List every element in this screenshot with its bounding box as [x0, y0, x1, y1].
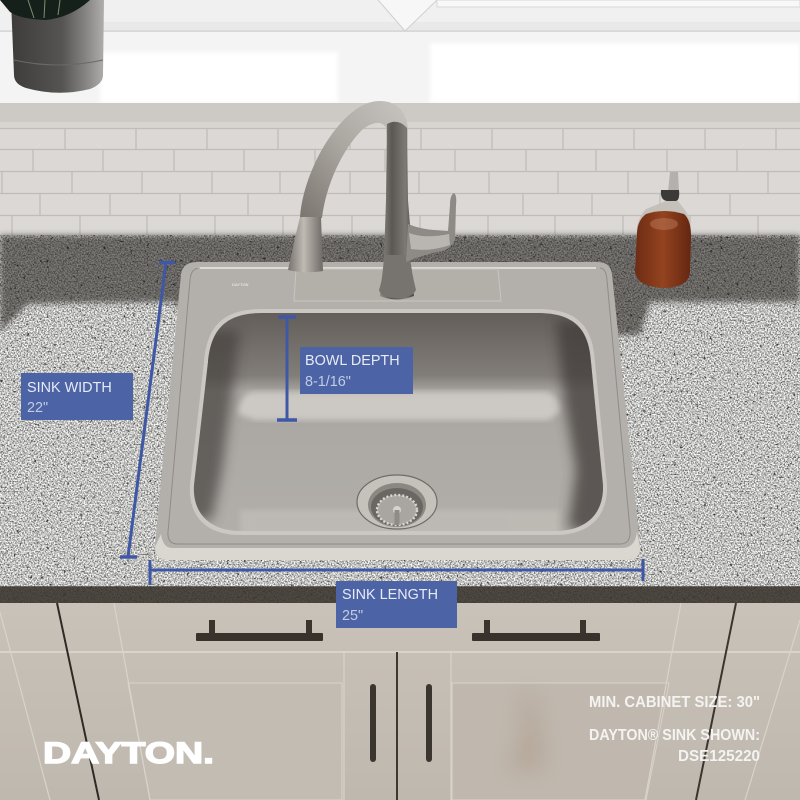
sink rim: [155, 262, 640, 560]
note: sink model shown: [589, 727, 760, 765]
logo: Dayton: DAYTON.: [43, 737, 214, 770]
bowl lip: [190, 309, 607, 535]
drawer handle left: [196, 620, 323, 641]
drawer handle right: [472, 620, 600, 641]
callout: sink width: 22": [27, 400, 48, 416]
icon: plant pot: [0, 0, 104, 93]
callout: bowl depth: [300, 347, 413, 394]
backsplash tiles: [0, 103, 800, 237]
deck plate: [294, 269, 501, 301]
faucet lever: [406, 193, 456, 262]
dimension line: sink width: [120, 262, 175, 557]
cabinet seams: [396, 652, 398, 800]
callout: sink width: [21, 373, 133, 420]
bowl floor highlight: [238, 392, 560, 420]
sink: [155, 262, 640, 560]
drain: [357, 475, 437, 529]
brand mark on rim: DAYTON: [232, 282, 249, 287]
granite countertop: [0, 235, 800, 603]
note: sink model shown: DAYTON® SINK SHOWN:: [589, 727, 760, 744]
bowl interior: [194, 313, 603, 531]
faucet neck: [380, 122, 414, 300]
faucet spout arc: [300, 101, 408, 218]
window sill background: [0, 0, 800, 104]
dimension line: bowl depth: [277, 317, 297, 420]
callout: bowl depth: BOWL DEPTH: [305, 353, 400, 369]
cabinets: [0, 603, 800, 800]
dimension line: sink length: [150, 559, 643, 585]
pull-down head: [288, 217, 323, 272]
callout: sink length: [336, 581, 457, 628]
faucet base: [379, 255, 416, 298]
callout: sink length: 25": [342, 608, 363, 624]
callout: sink width: SINK WIDTH: [27, 380, 112, 396]
note: minimum cabinet size: MIN. CABINET SIZE: 30": [589, 694, 760, 711]
note: sink model shown: DSE125220: [678, 748, 760, 765]
callout: bowl depth: 8-1/16": [305, 374, 351, 390]
door handle right: [426, 684, 432, 762]
faucet: [288, 101, 456, 300]
callout: sink length: SINK LENGTH: [342, 587, 438, 603]
icon: soap bottle: [635, 172, 691, 288]
door panels: [128, 683, 342, 800]
door handle left: [370, 684, 376, 762]
